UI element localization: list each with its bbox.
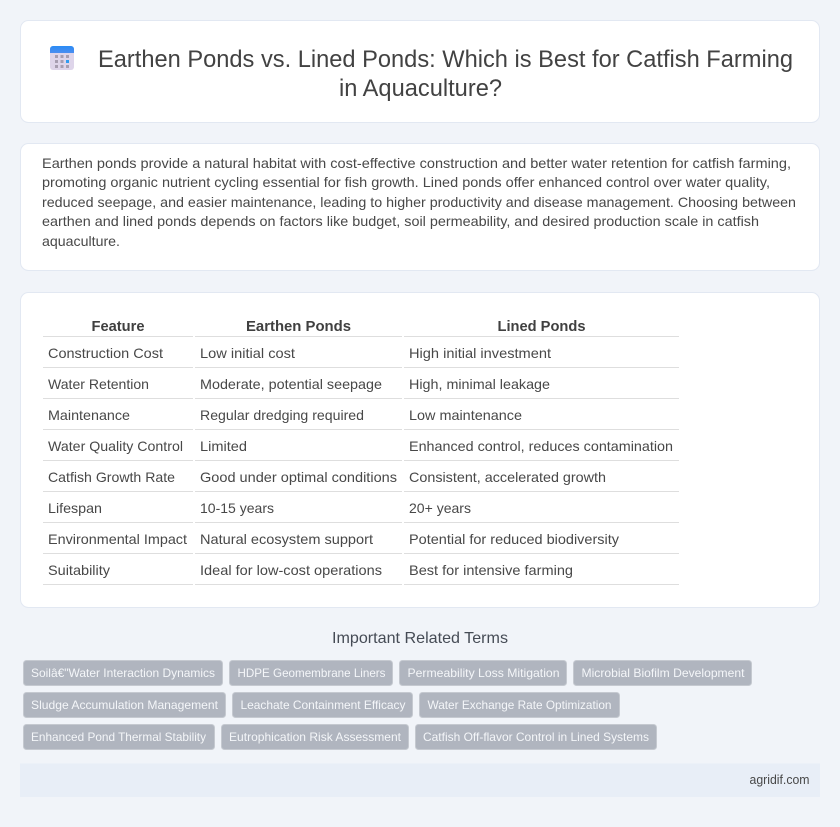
table column: lined ponds: High initial investment bbox=[409, 345, 551, 361]
panel: header bbox=[20, 20, 820, 122]
heading: related terms: Important Related Terms bbox=[332, 630, 508, 647]
table column: earthen ponds: 10-15 years bbox=[200, 500, 274, 516]
tags: related terms bbox=[24, 660, 752, 750]
text block: introduction: earthen and lined ponds depends on factors like budget, soil permeability, and desired production scale in catfish bbox=[42, 213, 759, 229]
tags: related terms: Sludge Accumulation Management bbox=[31, 698, 219, 712]
tags: related terms: Water Exchange Rate Optimization bbox=[428, 698, 612, 712]
table header bbox=[92, 318, 586, 335]
tags: related terms: Catfish Off-flavor Control in Lined Systems bbox=[423, 730, 649, 744]
table column: feature: Suitability bbox=[48, 562, 110, 578]
table column: lined ponds: High, minimal leakage bbox=[409, 376, 550, 392]
table column: lined ponds bbox=[409, 345, 673, 578]
panel: comparison table bbox=[20, 292, 820, 608]
table header: Earthen Ponds bbox=[246, 318, 351, 335]
footer bbox=[20, 764, 820, 797]
title: in Aquaculture? bbox=[339, 75, 502, 102]
text block: introduction: promoting organic nutrient cycling essential for fish growth. Lined ponds offer enhanced control over water quality, bbox=[42, 174, 770, 190]
table column: feature: Water Quality Control bbox=[48, 438, 183, 454]
title bbox=[98, 46, 793, 102]
table column: feature: Catfish Growth Rate bbox=[48, 469, 175, 485]
tags: related terms: Enhanced Pond Thermal Stability bbox=[31, 730, 206, 744]
table column: feature: Environmental Impact bbox=[48, 531, 187, 547]
title: Earthen Ponds vs. Lined Ponds: Which is Best for Catfish Farming bbox=[98, 46, 793, 73]
table column: feature: Water Retention bbox=[48, 376, 149, 392]
footer: agridif.com bbox=[750, 772, 810, 787]
table column: feature: Lifespan bbox=[48, 500, 102, 516]
table column: earthen ponds: Low initial cost bbox=[200, 345, 295, 361]
table header: Feature bbox=[92, 318, 144, 335]
table column: lined ponds: 20+ years bbox=[409, 500, 471, 516]
tags: related terms: Leachate Containment Efficacy bbox=[240, 698, 406, 712]
table column: feature bbox=[48, 345, 187, 578]
text block: introduction: reduced seepage, and easier maintenance, leading to higher productivity and disease management. Choosing between bbox=[42, 194, 796, 210]
table column: lined ponds: Potential for reduced biodiversity bbox=[409, 531, 619, 547]
tags: related terms: HDPE Geomembrane Liners bbox=[238, 666, 386, 680]
table column: earthen ponds: Regular dredging required bbox=[200, 407, 364, 423]
tags: related terms: Soilâ€"Water Interaction Dynamics bbox=[31, 666, 215, 680]
table column: earthen ponds: Ideal for low-cost operations bbox=[200, 562, 382, 578]
table column: feature: Maintenance bbox=[48, 407, 130, 423]
text block: introduction bbox=[42, 155, 796, 249]
table column: earthen ponds: Moderate, potential seepage bbox=[200, 376, 382, 392]
table column: feature: Construction Cost bbox=[48, 345, 163, 361]
text block: introduction: Earthen ponds provide a natural habitat with cost-effective construction and better water retention for catfish farming, bbox=[42, 155, 791, 171]
table column: lined ponds: Consistent, accelerated growth bbox=[409, 469, 606, 485]
tags: related terms: Microbial Biofilm Development bbox=[582, 666, 745, 680]
table column: lined ponds: Enhanced control, reduces contamination bbox=[409, 438, 673, 454]
table column: lined ponds: Best for intensive farming bbox=[409, 562, 573, 578]
table column: lined ponds: Low maintenance bbox=[409, 407, 522, 423]
panel: introduction bbox=[20, 144, 820, 270]
table header: Lined Ponds bbox=[498, 318, 586, 335]
table column: earthen ponds bbox=[200, 345, 397, 578]
tags: related terms: Eutrophication Risk Assessment bbox=[229, 730, 402, 744]
table column: earthen ponds: Limited bbox=[200, 438, 247, 454]
icon: calendar bbox=[50, 46, 74, 70]
table column: earthen ponds: Natural ecosystem support bbox=[200, 531, 373, 547]
text block: introduction: aquaculture. bbox=[42, 233, 120, 249]
table column: earthen ponds: Good under optimal conditions bbox=[200, 469, 397, 485]
tags: related terms: Permeability Loss Mitigation bbox=[408, 666, 560, 680]
